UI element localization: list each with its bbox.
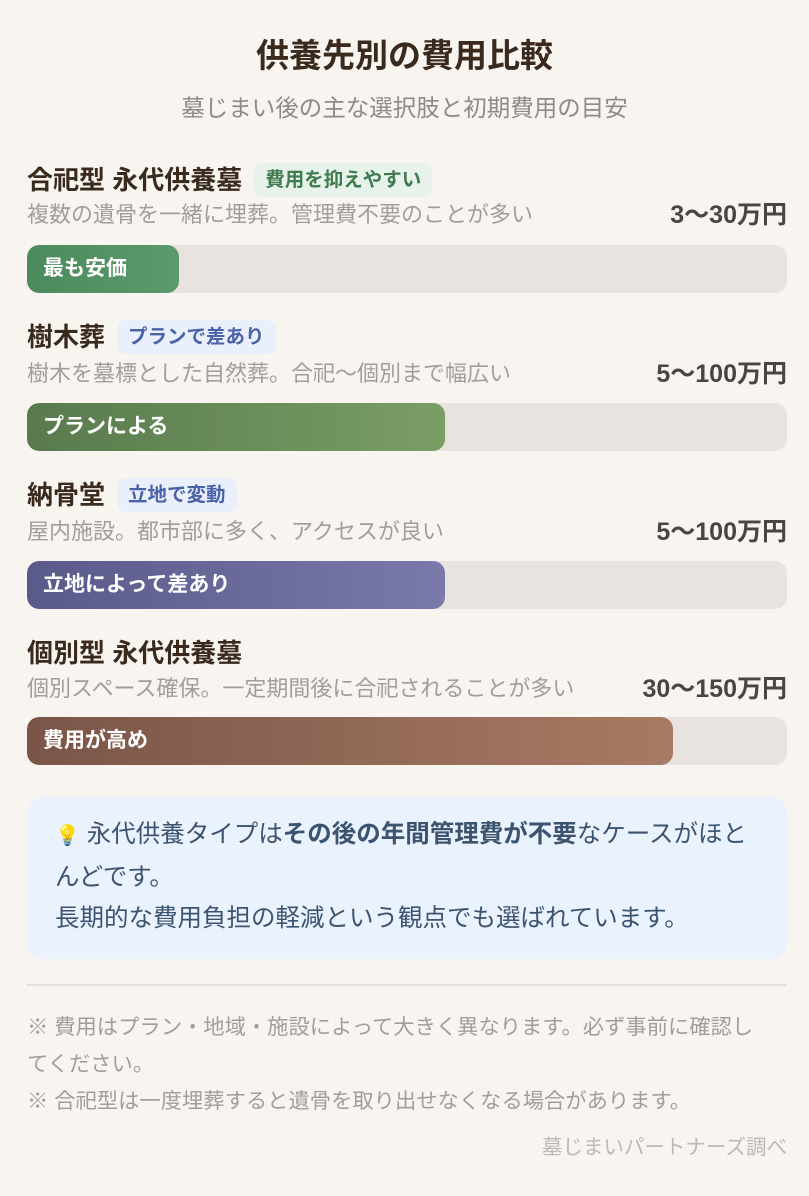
heading [27, 163, 432, 197]
bar: 費用が高め [43, 729, 148, 752]
footnotes [27, 1015, 753, 1113]
description: 屋内施設。都市部に多く、アクセスが良い [27, 519, 444, 544]
heading [27, 320, 276, 354]
callout [27, 797, 787, 959]
price: 30〜150万円 [642, 675, 787, 703]
heading: 立地で変動 [128, 484, 226, 506]
subtitle: 墓じまい後の主な選択肢と初期費用の目安 [181, 95, 628, 121]
bar: 立地によって差あり [43, 573, 230, 596]
footnotes: てください。 [27, 1052, 154, 1076]
heading: 樹木葬 [27, 322, 105, 352]
heading: プランで差あり [128, 326, 265, 348]
price: 5〜100万円 [656, 518, 787, 546]
footnotes: ※ 合祀型は一度埋葬すると遺骨を取り出せなくなる場合があります。 [27, 1089, 691, 1113]
bar [27, 245, 787, 293]
description: 個別スペース確保。一定期間後に合祀されることが多い [27, 676, 574, 701]
heading [27, 478, 237, 512]
callout: 💡 永代供養タイプはその後の年間管理費が不要なケースがほとんどです。 [55, 821, 747, 891]
title: 供養先別の費用比較 [256, 37, 553, 74]
description: 複数の遺骨を一緒に埋葬。管理費不要のことが多い [27, 202, 533, 227]
heading: 納骨堂 [27, 480, 105, 510]
heading: 合祀型 永代供養墓 [27, 165, 242, 195]
panel: 合祀型 [27, 163, 787, 293]
credit: 墓じまいパートナーズ調べ [542, 1136, 787, 1159]
panel: 納骨堂 [27, 478, 787, 609]
footnotes: ※ 費用はプラン・地域・施設によって大きく異なります。必ず事前に確認し [27, 1015, 753, 1039]
price: 3〜30万円 [670, 201, 787, 229]
panel: 個別型 [27, 638, 787, 765]
bar: プランによる [43, 415, 168, 438]
heading: 個別型 永代供養墓 [27, 638, 242, 668]
bar: 最も安価 [43, 257, 127, 280]
heading: 費用を抑えやすい [265, 169, 421, 191]
panel: 樹木葬 [27, 320, 787, 451]
description: 樹木を墓標とした自然葬。合祀〜個別まで幅広い [27, 361, 511, 386]
bar [27, 717, 787, 765]
bar [27, 561, 787, 609]
bar [27, 403, 787, 451]
price: 5〜100万円 [656, 360, 787, 388]
callout: 長期的な費用負担の軽減という観点でも選ばれています。 [55, 905, 689, 932]
